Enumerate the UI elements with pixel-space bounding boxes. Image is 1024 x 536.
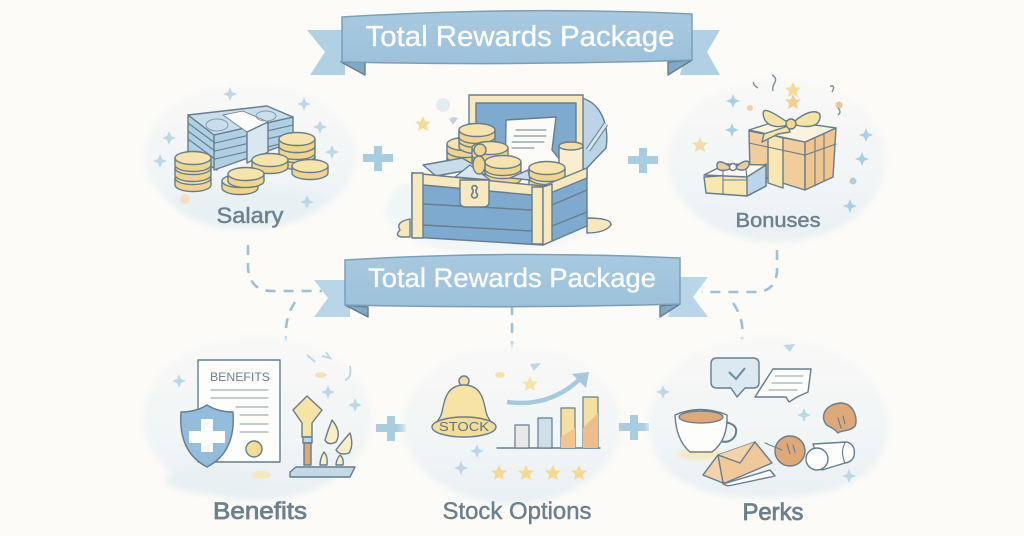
benefits label: Benefits <box>213 498 307 525</box>
middle banner <box>314 254 708 317</box>
icon: trend arrow <box>507 372 589 403</box>
plus sign <box>619 415 649 440</box>
icon: small gift <box>704 161 766 196</box>
icon: cookies <box>765 403 856 466</box>
icon: cash stack <box>188 106 293 170</box>
icon: key and flames <box>290 396 355 477</box>
icon: coffee cup <box>675 410 736 452</box>
icon: stock bell <box>432 376 496 437</box>
bonuses bubble <box>668 78 886 242</box>
panel: benefits <box>143 335 371 525</box>
banner title text: Total Rewards Package <box>368 263 656 293</box>
icon: shield <box>181 405 233 467</box>
plus sign <box>628 148 658 173</box>
chest treasure <box>423 117 583 192</box>
salary sparkles <box>153 87 339 209</box>
icon: open book <box>703 442 775 486</box>
benefits bubble <box>143 335 371 501</box>
chest keyhole <box>472 186 478 198</box>
panel: stock options <box>403 344 621 525</box>
icon: notes speech bubble <box>755 369 811 402</box>
salary bubble <box>144 83 356 228</box>
stock sparkles <box>454 363 541 475</box>
perks label: Perks <box>742 499 804 526</box>
chest backdrop wash <box>385 183 591 252</box>
icon: coins <box>175 132 328 194</box>
icon: bar chart <box>497 397 600 448</box>
plus sign <box>363 146 393 171</box>
icon: stock bell: STOCK <box>439 420 490 434</box>
panel: salary <box>144 83 356 228</box>
chest sparkles <box>415 98 458 131</box>
banner title text: Total Rewards Package <box>366 21 674 53</box>
stock options bubble <box>403 344 621 504</box>
benefits sparkles <box>172 352 362 479</box>
salary label: Salary <box>216 203 284 228</box>
icon: benefits document: BENEFITS <box>210 372 270 384</box>
chest body <box>397 168 611 245</box>
icon: star rating <box>491 465 587 480</box>
dashed connector: bonuses to banner <box>702 250 777 292</box>
dashed connector: salary to banner <box>248 245 322 291</box>
icon: check speech bubble <box>711 358 759 397</box>
dashed connector: banner to stock options <box>511 305 513 350</box>
plus sign <box>376 416 406 441</box>
dashed connector: banner to benefits <box>286 302 295 342</box>
icon: large gift <box>749 110 836 190</box>
icon: benefits document <box>198 360 280 462</box>
perks bubble <box>648 335 889 498</box>
chest lid <box>469 95 607 183</box>
panel: bonuses <box>668 75 886 242</box>
panel: perks <box>648 335 889 526</box>
panel: treasure chest <box>385 95 611 252</box>
dashed connector: banner to perks <box>733 303 743 340</box>
top banner <box>307 11 720 75</box>
bonuses confetti <box>692 75 873 213</box>
icon: rolled towel <box>806 442 854 470</box>
perks sparkles <box>656 344 856 483</box>
bonuses label: Bonuses <box>736 210 820 232</box>
stock options label: Stock Options <box>442 498 592 525</box>
